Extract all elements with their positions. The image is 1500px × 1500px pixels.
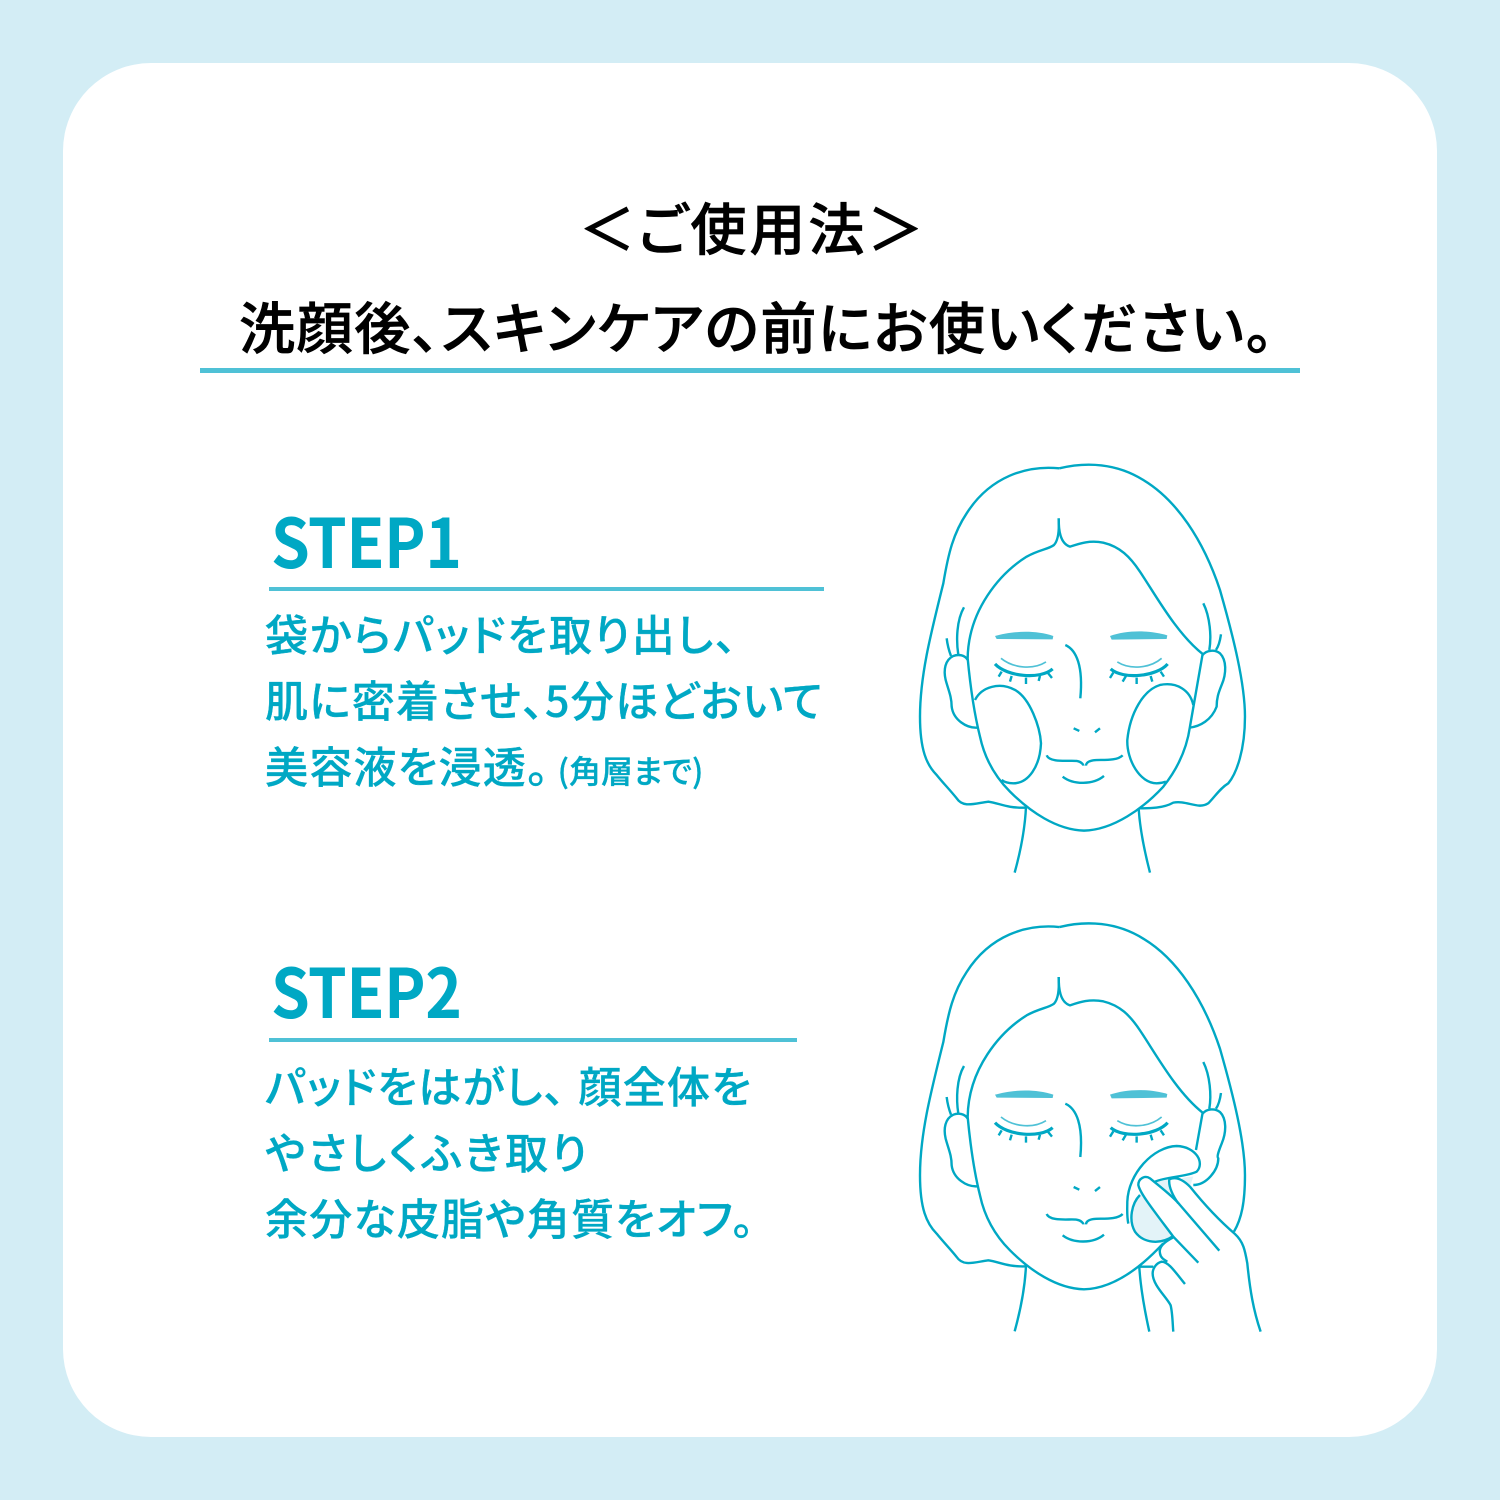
step 2 text: やさしくふき取り: [265, 1120, 590, 1182]
step 1 text: 美容液を浸透。(角層まで): [265, 734, 703, 796]
step 2 text: 余分な皮脂や角質をオフ。: [265, 1186, 755, 1248]
step 2 text: パッドをはがし、 顔全体を: [265, 1054, 752, 1116]
step 1 text: 肌に密着させ、5分ほどおいて: [265, 668, 824, 730]
subtitle: 洗顔後、スキンケアの前にお使いください。: [239, 285, 1275, 366]
heading rule: [200, 368, 1300, 373]
step 2 rule: [269, 1038, 797, 1042]
title: ＜ご使用法＞: [579, 186, 926, 267]
step 1 heading: STEP1: [271, 489, 461, 588]
step 1 text: [265, 602, 824, 796]
step 2 heading: STEP2: [271, 939, 461, 1038]
step 1 rule: [269, 587, 824, 591]
step 1 text: 袋からパッドを取り出し、: [265, 602, 739, 664]
step 2 text: [265, 1054, 755, 1248]
